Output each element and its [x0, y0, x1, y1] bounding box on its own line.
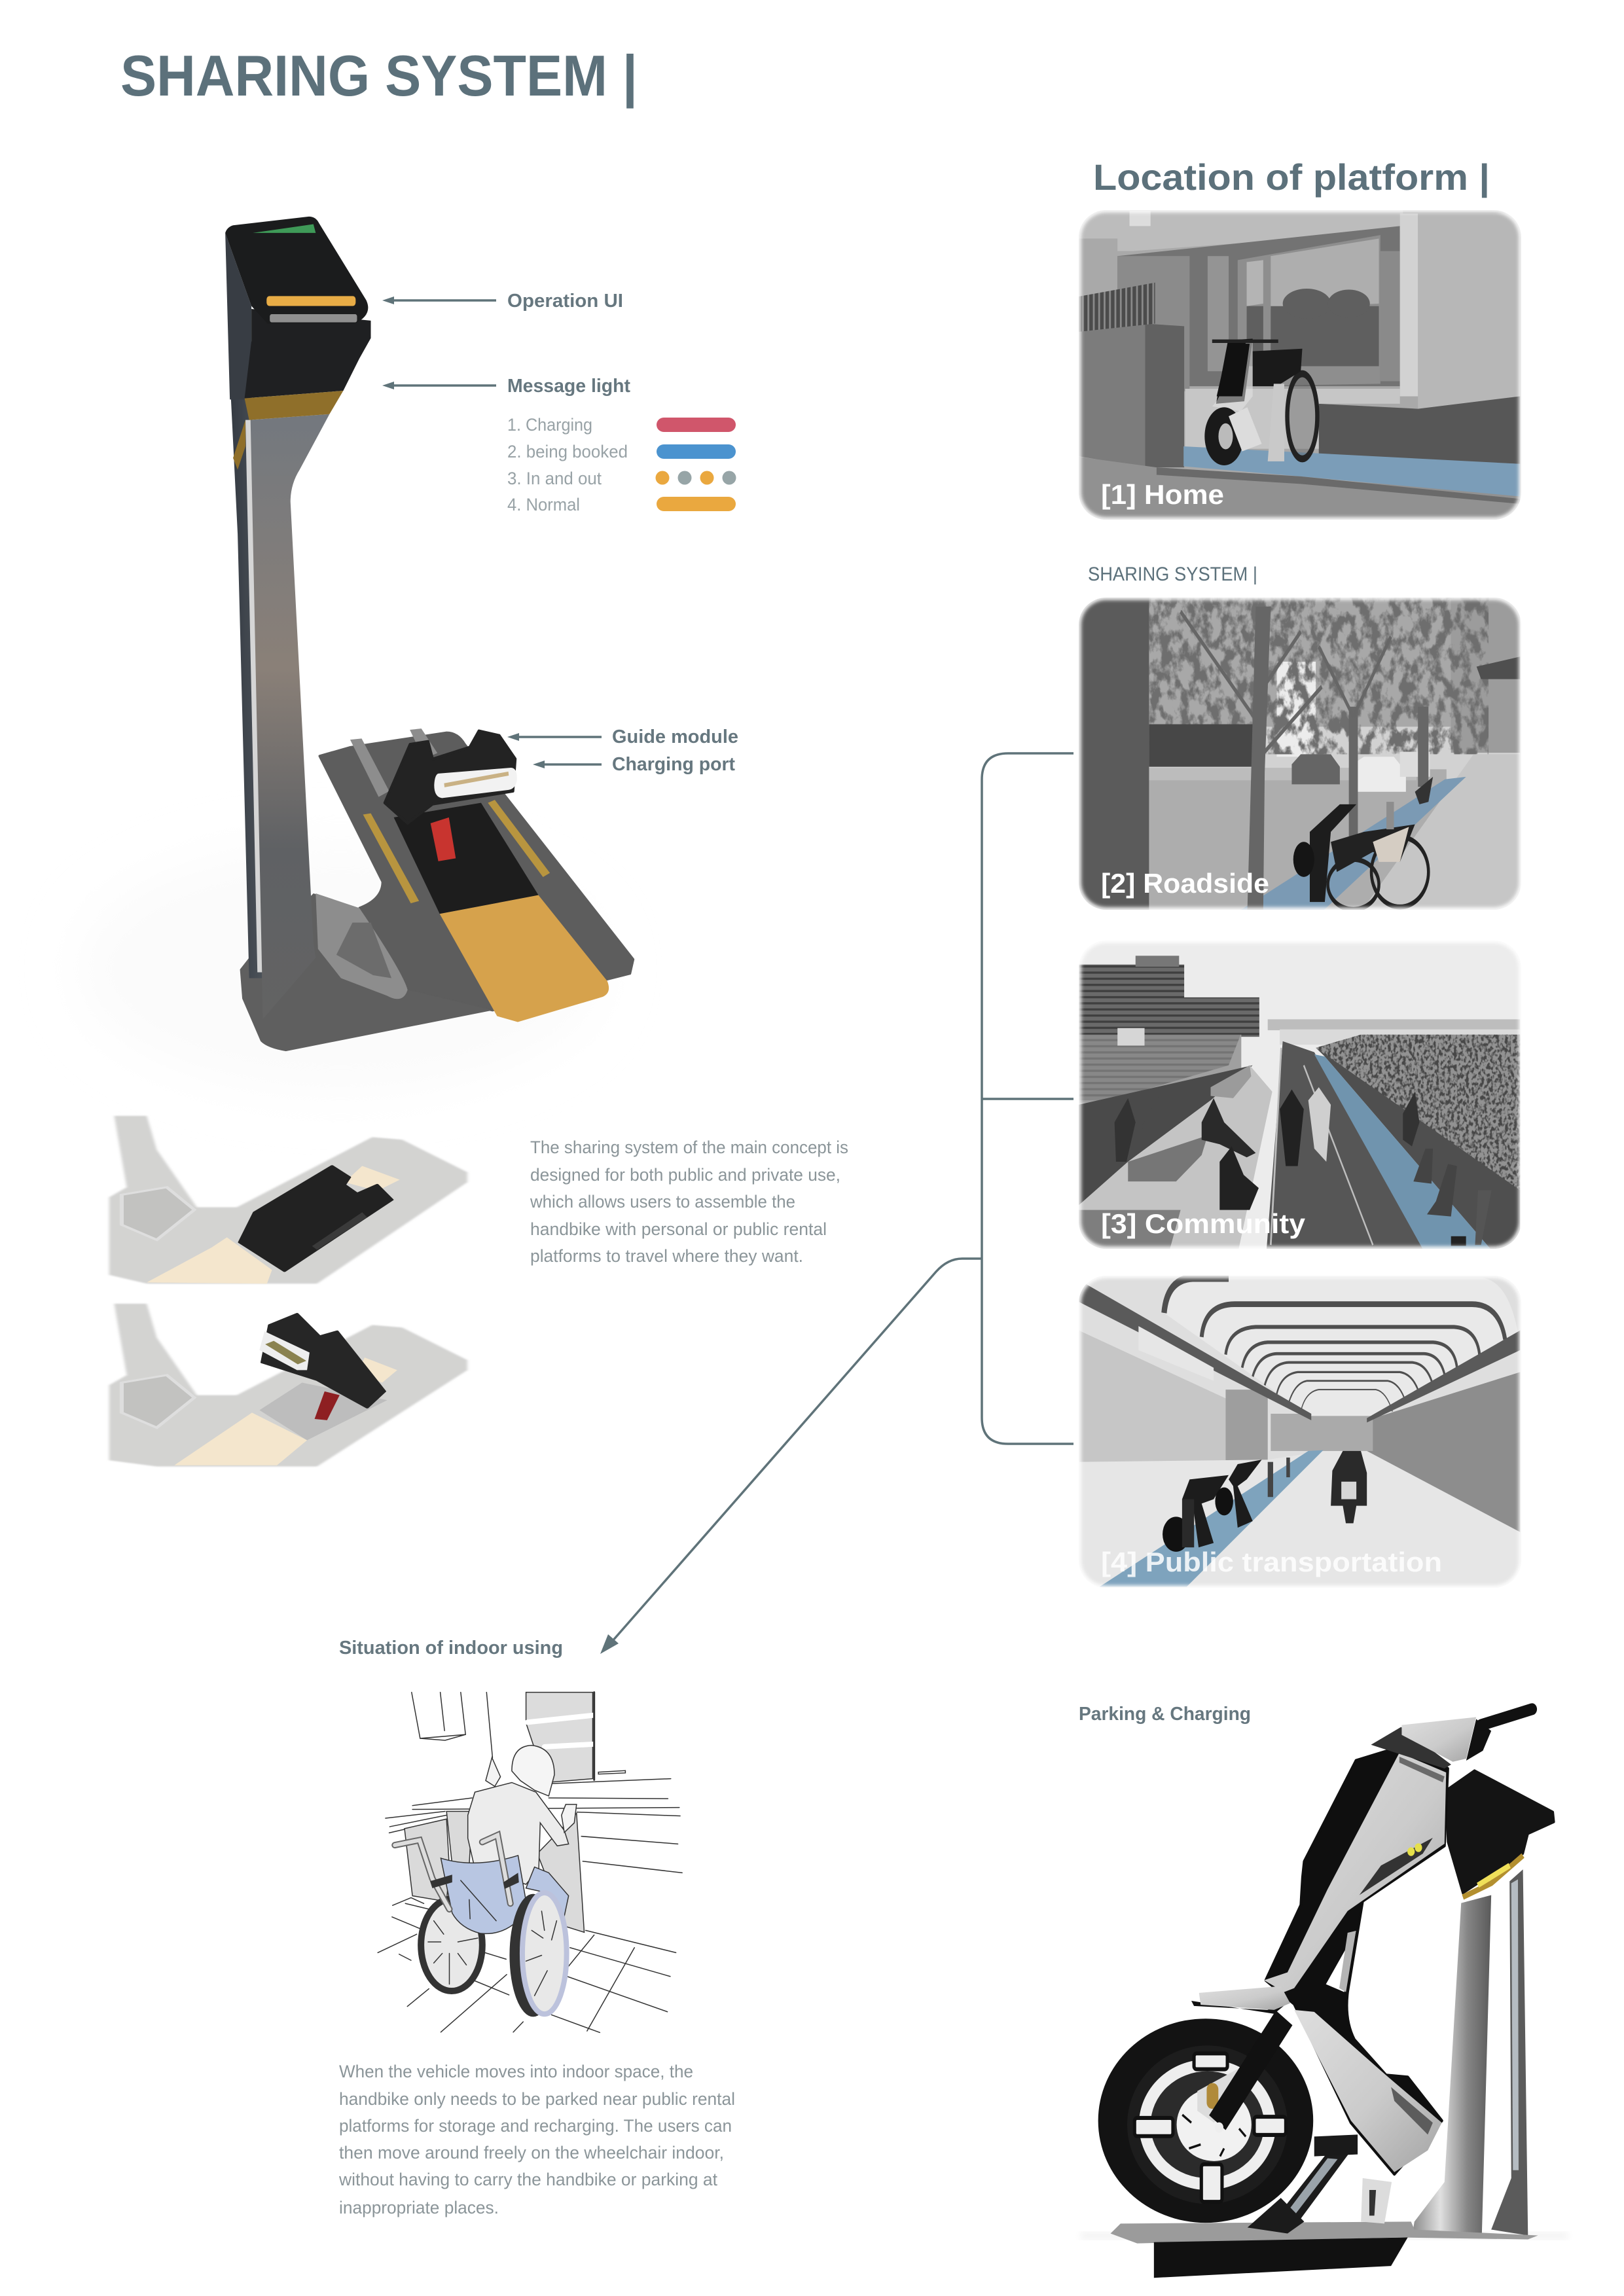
label: home: [1] Home [1101, 479, 1224, 510]
silver panel [1264, 1753, 1446, 1992]
front fork [1218, 2018, 1284, 2123]
wood benches [1079, 1066, 1272, 1254]
callout: charging port [533, 754, 735, 775]
charging port [434, 768, 517, 798]
blue lane [1100, 1450, 1324, 1587]
text block: sharing system description: platforms to travel where they want. [530, 1246, 803, 1266]
back wall [1271, 1414, 1373, 1451]
lower cabinet [405, 1819, 449, 1901]
ceiling arches [1164, 1278, 1520, 1416]
yellow flap [440, 895, 609, 1022]
seated people [1202, 1098, 1255, 1157]
stand column [1413, 1895, 1491, 2233]
distant buildings [1451, 598, 1520, 753]
guide module [385, 731, 515, 823]
red connector [431, 817, 456, 861]
legend: message light states: 1. Charging [507, 415, 592, 435]
heading: parking and charging: Parking & Charging [1079, 1704, 1251, 1725]
second stand leg [1491, 1869, 1528, 2236]
seat back [441, 1856, 528, 1933]
left deck [1079, 1066, 1253, 1206]
text block: sharing system description: The sharing system of the main concept is [530, 1138, 848, 1157]
recessed facade [1117, 226, 1400, 386]
callout: message light: Message light [507, 376, 630, 397]
bracket [1361, 2178, 1392, 2223]
panel: roadside [1075, 592, 1526, 917]
parked handbikes [1163, 1516, 1189, 1552]
illustration: wheelchair user indoors [378, 1693, 682, 2032]
branches [1181, 611, 1391, 752]
roof beams [1079, 1280, 1311, 1420]
wheel spokes [1134, 2053, 1286, 2202]
image: handbike parked on charging platform [1081, 1709, 1568, 2278]
text block: sharing system description: handbike with personal or public rental [530, 1219, 827, 1239]
green indicator [253, 224, 316, 233]
label: public transportation: [4] Public transportation [1101, 1547, 1442, 1577]
arrow: bracket to indoor situation [600, 1259, 982, 1654]
charging platform product render [225, 217, 634, 1051]
heading: situation of indoor using: Situation of indoor using [339, 1638, 563, 1659]
trunks [1247, 607, 1271, 912]
triangle cut-out [1326, 1931, 1356, 1992]
room lines [378, 1693, 682, 2032]
shelves [526, 1693, 593, 1782]
soft shadow behind charging platform [79, 844, 602, 1093]
silver lower body [1294, 2010, 1442, 2172]
label: community: [3] Community [1101, 1208, 1306, 1239]
skyline [1268, 1019, 1520, 1030]
legend: message light states: 2. being booked [507, 442, 628, 461]
sidewalk [1361, 754, 1520, 912]
road [1146, 769, 1447, 910]
cars [1291, 754, 1340, 784]
dark storefront [1149, 725, 1253, 767]
yellow side strips [363, 814, 419, 903]
floor shadow [1081, 2233, 1568, 2239]
charging platforms [1413, 1149, 1433, 1183]
text block: indoor description: without having to carry the handbike or parking at [338, 2170, 717, 2189]
text block: sharing system description: which allows users to assemble the [530, 1192, 795, 1211]
callout: message light [382, 376, 630, 397]
rear wheel right [509, 1894, 556, 2017]
callout: operation UI: Operation UI [507, 291, 623, 312]
text block: indoor description [338, 2062, 735, 2217]
ground [1080, 457, 1519, 518]
rails [350, 738, 389, 797]
callout: guide module [507, 726, 738, 747]
legend: message light states: 4. Normal [507, 495, 580, 514]
column head [225, 233, 251, 399]
left wall [1079, 1331, 1225, 1464]
buildings [1079, 965, 1184, 1022]
base plate [1111, 2221, 1538, 2244]
orange indicator [266, 296, 355, 306]
rear wheel left [421, 1899, 482, 1991]
image: module docked [109, 1116, 467, 1283]
dark plinth [1319, 396, 1520, 464]
top silver cover [1371, 1727, 1451, 1768]
image: module raised [109, 1304, 467, 1467]
walking people [1280, 1089, 1304, 1166]
vegetation [1316, 1035, 1520, 1193]
black tray [1154, 2238, 1408, 2278]
stand head [1446, 1770, 1554, 1893]
callout: charging port: Charging port [612, 754, 735, 775]
blue lane [1238, 777, 1466, 912]
cobble path [1266, 1041, 1426, 1254]
dark recess [394, 803, 539, 914]
message light [1463, 1856, 1523, 1897]
right awning [1477, 656, 1520, 679]
column [230, 376, 263, 978]
heading: location of platform: Location of platform | [1093, 156, 1490, 198]
title: SHARING SYSTEM | [120, 43, 638, 109]
stand foot [240, 893, 492, 1051]
left wall [1079, 324, 1145, 467]
trousers [526, 1867, 569, 1923]
connector: bracket to location panels [982, 753, 1074, 1444]
text block: indoor description: When the vehicle moves into indoor space, the [339, 2062, 693, 2081]
floor [1079, 1451, 1520, 1591]
label: roadside: [2] Roadside [1101, 868, 1269, 899]
blue lane [1314, 1054, 1494, 1254]
railing [1316, 1048, 1520, 1254]
parked handbike [1216, 338, 1253, 404]
centre handbike [1331, 1451, 1367, 1523]
legend: message light states: 3. In and out [507, 469, 602, 488]
parked handbike [1310, 804, 1356, 902]
panel: public transportation [1075, 1271, 1526, 1591]
tree canopy [1149, 594, 1489, 754]
person [468, 1782, 569, 1884]
base plate [319, 732, 634, 1011]
bike black body [1266, 1747, 1448, 2174]
panel: home [1075, 206, 1526, 531]
charging frame [1279, 2153, 1348, 2221]
text block: indoor description: handbike only needs to be parked near public rental [339, 2089, 735, 2109]
operation UI top face [225, 217, 368, 323]
dark pillar [1075, 592, 1149, 917]
front tyre [1098, 2018, 1313, 2223]
right glass wall [1367, 1372, 1520, 1532]
blue parking lane [1183, 446, 1520, 496]
window [1238, 235, 1380, 386]
callout: operation UI [382, 291, 623, 312]
hub plate [1197, 2068, 1251, 2123]
text block: indoor description: platforms for storage and recharging. The users can [339, 2116, 732, 2136]
handlebar [1481, 1709, 1532, 1725]
text block: indoor description: then move around freely on the wheelchair indoor, [339, 2143, 724, 2162]
panel: community [1075, 938, 1526, 1254]
message light band [245, 391, 343, 420]
text block: indoor description: inappropriate places. [339, 2198, 499, 2217]
push handles [395, 1840, 449, 1909]
text block: sharing system description: designed for both public and private use, [530, 1165, 840, 1185]
callout: guide module: Guide module [612, 726, 738, 747]
saddle [1191, 2000, 1291, 2014]
subheading: sharing system: SHARING SYSTEM | [1088, 564, 1257, 585]
legend: message light states [507, 415, 736, 514]
text block: sharing system description [530, 1138, 848, 1266]
